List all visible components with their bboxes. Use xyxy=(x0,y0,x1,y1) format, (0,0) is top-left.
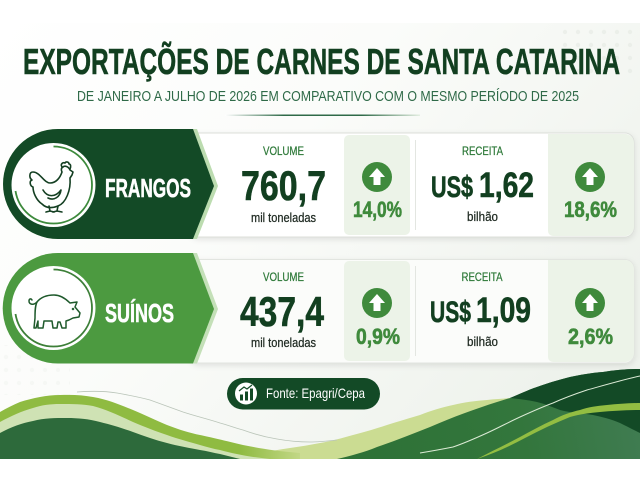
metric: receita frangos xyxy=(431,144,534,224)
metric: receita suinos: bilhão xyxy=(467,335,498,349)
data card: suinos xyxy=(190,260,634,363)
label: suinos: SUÍNOS xyxy=(105,298,174,328)
banner: frangos xyxy=(3,129,218,239)
source text: Fonte: Epagri/Cepa xyxy=(266,385,365,401)
metric: volume suinos xyxy=(240,270,325,350)
metric: receita suinos: US$ xyxy=(430,296,471,329)
change: receita suinos xyxy=(548,260,634,362)
metric: volume suinos: VOLUME xyxy=(263,270,304,284)
metric: volume frangos: VOLUME xyxy=(263,144,304,158)
source pill xyxy=(227,378,380,410)
change: volume frangos: 14,0% xyxy=(353,197,402,222)
change: volume frangos xyxy=(344,135,410,235)
change: volume suinos: 0,9% xyxy=(356,324,400,349)
icon: chicken xyxy=(30,162,73,212)
change: receita frangos: 18,6% xyxy=(564,197,617,222)
panel: suinos xyxy=(3,253,634,364)
background waves xyxy=(0,369,640,459)
metric: receita frangos: bilhão xyxy=(467,210,498,224)
metric: volume frangos: mil toneladas xyxy=(251,211,316,225)
metric: volume suinos: mil toneladas xyxy=(251,336,316,350)
change: receita frangos xyxy=(548,134,634,236)
banner: suinos xyxy=(3,253,218,364)
metric: receita frangos: US$ xyxy=(431,171,473,204)
metric: receita frangos: 1,62 xyxy=(479,166,534,205)
icon: pig xyxy=(29,295,80,328)
metric: volume frangos: 760,7 xyxy=(241,162,326,209)
metric: receita frangos: RECEITA xyxy=(462,144,503,158)
data card: frangos xyxy=(190,133,634,237)
change: receita suinos: 2,6% xyxy=(568,324,613,349)
metric: volume suinos: 437,4 xyxy=(240,288,325,335)
metric: receita suinos: RECEITA xyxy=(462,270,502,284)
metric: receita suinos xyxy=(430,270,531,349)
metric: receita suinos: 1,09 xyxy=(476,291,531,330)
icon: bar chart xyxy=(235,382,257,404)
change: volume suinos xyxy=(344,261,410,361)
label: frangos: FRANGOS xyxy=(105,173,191,203)
panel: frangos xyxy=(3,129,634,239)
metric: volume frangos xyxy=(241,144,326,225)
